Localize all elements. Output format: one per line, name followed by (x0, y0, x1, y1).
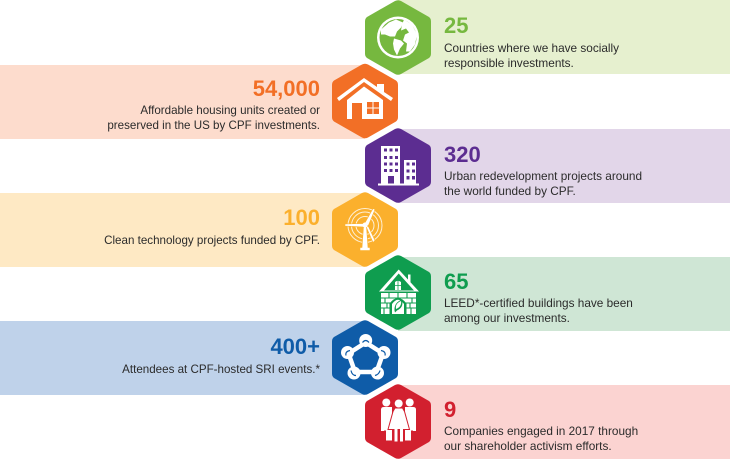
icon: people group (365, 384, 431, 459)
panel: 54,000 housing (0, 65, 365, 139)
panel: 9 companies (398, 385, 730, 459)
text: 320 urban: Urban redevelopment projects around (444, 169, 642, 183)
text: 25 countries (444, 13, 619, 70)
icon: circle of people (332, 320, 398, 395)
text: 400+ attendees: Attendees at CPF-hosted SRI events.* (122, 363, 320, 376)
icon: house (332, 64, 398, 138)
panel: 25 countries (398, 0, 730, 74)
text: 25 countries: Countries where we have socially (444, 41, 619, 55)
text: 9 companies: Companies engaged in 2017 through (444, 424, 638, 438)
icon: green house (365, 255, 431, 330)
icon: globe (365, 0, 431, 75)
panel: 400+ attendees (0, 321, 365, 395)
text: 400+ attendees: 400+ (270, 334, 320, 359)
text: 320 urban: the world funded by CPF. (444, 184, 576, 198)
text: 9 companies (444, 397, 638, 453)
text: 320 urban: 320 (444, 142, 481, 167)
text: 65 LEED: among our investments. (444, 311, 570, 325)
text: 54,000 housing (107, 76, 320, 132)
text: 320 urban (444, 142, 642, 198)
text: 54,000 housing: preserved in the US by CPF investments. (107, 119, 320, 132)
text: 100 clean tech (104, 205, 320, 247)
icon: buildings (365, 128, 431, 203)
text: 65 LEED: 65 (444, 269, 468, 294)
text: 54,000 housing: Affordable housing units created or (140, 104, 320, 117)
text: 9 companies: 9 (444, 397, 456, 422)
text: 400+ attendees (122, 334, 320, 376)
text: 25 countries: 25 (444, 13, 468, 38)
panel: 100 clean tech (0, 193, 365, 267)
text: 100 clean tech: 100 (283, 205, 320, 230)
panel: 65 LEED (398, 257, 730, 331)
icon: wind turbine (332, 192, 398, 267)
text: 100 clean tech: Clean technology projects funded by CPF. (104, 234, 320, 247)
text: 25 countries: responsible investments. (444, 56, 574, 70)
text: 9 companies: our shareholder activism efforts. (444, 439, 612, 453)
panel: 320 urban (398, 129, 730, 203)
text: 65 LEED (444, 269, 633, 325)
text: 65 LEED: LEED*-certified buildings have been (444, 296, 633, 310)
text: 54,000 housing: 54,000 (253, 76, 320, 101)
